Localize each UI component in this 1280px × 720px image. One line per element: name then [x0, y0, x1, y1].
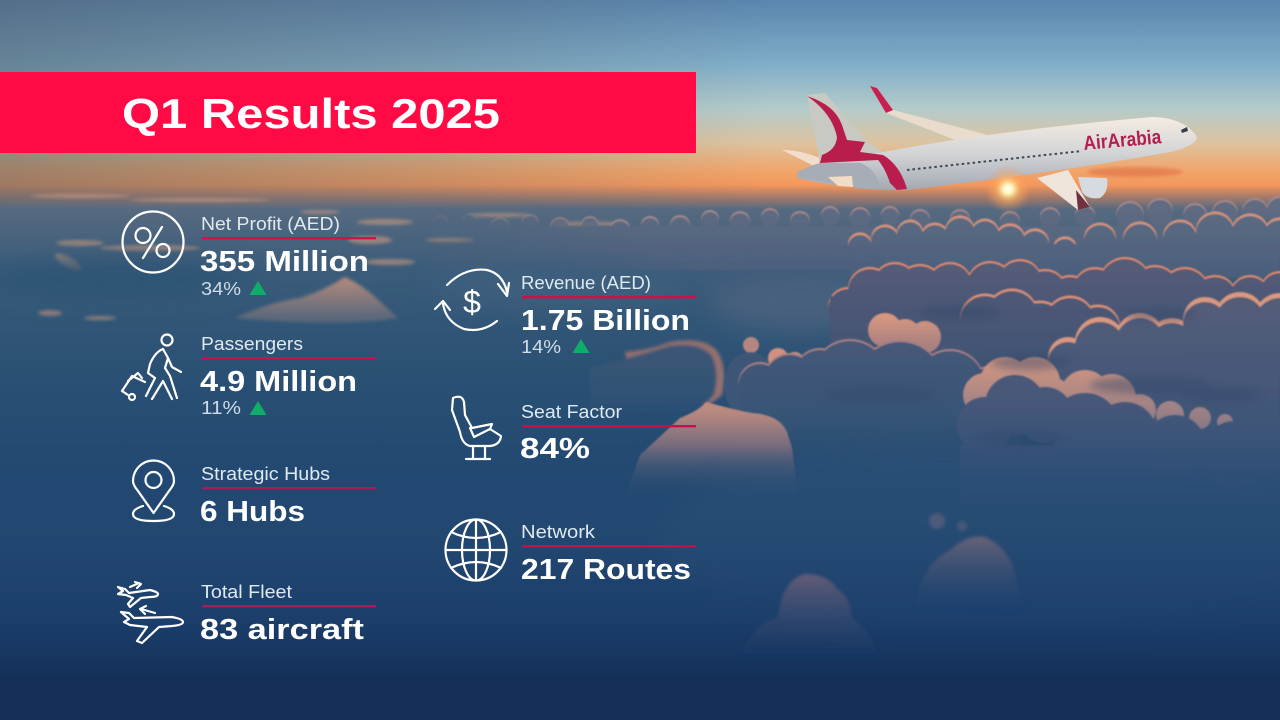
metric: revenue [435, 270, 696, 357]
icon: up triangle [250, 281, 266, 295]
metric: seat factor: 84% [520, 433, 590, 465]
metric: revenue: 14% [521, 337, 561, 357]
cloud E body [957, 375, 1280, 535]
icon: up triangle [250, 401, 266, 415]
metric: seat factor: Seat Factor [521, 402, 622, 422]
background: sunset sky [0, 0, 1280, 212]
metric: revenue: Revenue (AED) [521, 273, 651, 293]
icon: dollar cycle [435, 270, 509, 330]
metric: net profit [122, 212, 376, 299]
metric: seat factor [452, 397, 696, 465]
icon: map pin [133, 460, 174, 521]
metric: total fleet: 83 aircraft [200, 614, 364, 646]
central dark cloud with lit right edge [590, 340, 724, 414]
metric: passengers [122, 334, 376, 418]
title: Q1 Results 2025 [122, 90, 500, 137]
cloud B [955, 288, 1120, 387]
metric: revenue: 1.75 Billion [521, 305, 690, 337]
background: cloud layer [0, 186, 1280, 650]
icon: dollar cycle: $ [463, 284, 481, 320]
icon: percent [122, 212, 184, 272]
metric: passengers: 4.9 Million [200, 366, 357, 398]
icon: airline seat [452, 397, 501, 459]
icon: globe [446, 520, 506, 580]
left peach cloud [235, 277, 398, 323]
metric: net profit: 34% [201, 279, 241, 299]
left streaks [30, 194, 630, 320]
airline name: AirArabia [1083, 126, 1163, 155]
metric: net profit: 355 Million [200, 246, 369, 278]
airplane illustration [782, 86, 1197, 213]
metric: strategic hubs [133, 460, 376, 528]
icon: traveller [122, 334, 181, 400]
interior cloud shading [825, 305, 1260, 449]
low clouds [735, 513, 1025, 668]
banner: title [0, 72, 696, 153]
metric: passengers: Passengers [201, 334, 303, 354]
crown of cloud E [963, 357, 1233, 430]
peach cloud [620, 402, 800, 510]
bottom fade [0, 420, 1280, 720]
metric: net profit: Net Profit (AED) [201, 214, 340, 234]
metric: network: 217 Routes [521, 554, 691, 586]
cloud C body [738, 339, 1020, 480]
metric: network: Network [521, 522, 596, 542]
metric: strategic hubs: Strategic Hubs [201, 464, 330, 484]
soft shadow masses [0, 260, 1280, 640]
small lit puffs [724, 337, 810, 425]
icon: up triangle [572, 339, 590, 353]
metric: network [446, 520, 696, 586]
crown of cloud C [868, 313, 941, 353]
sun glow [984, 165, 1032, 213]
far cloud band [430, 196, 1280, 278]
cloud D right [1048, 292, 1280, 462]
icon: two aircraft [118, 582, 183, 643]
back row cloud [828, 257, 1280, 390]
metric: total fleet: Total Fleet [201, 582, 292, 602]
metric: strategic hubs: 6 Hubs [200, 496, 305, 528]
metric: total fleet [118, 582, 376, 646]
metric: passengers: 11% [201, 398, 241, 418]
